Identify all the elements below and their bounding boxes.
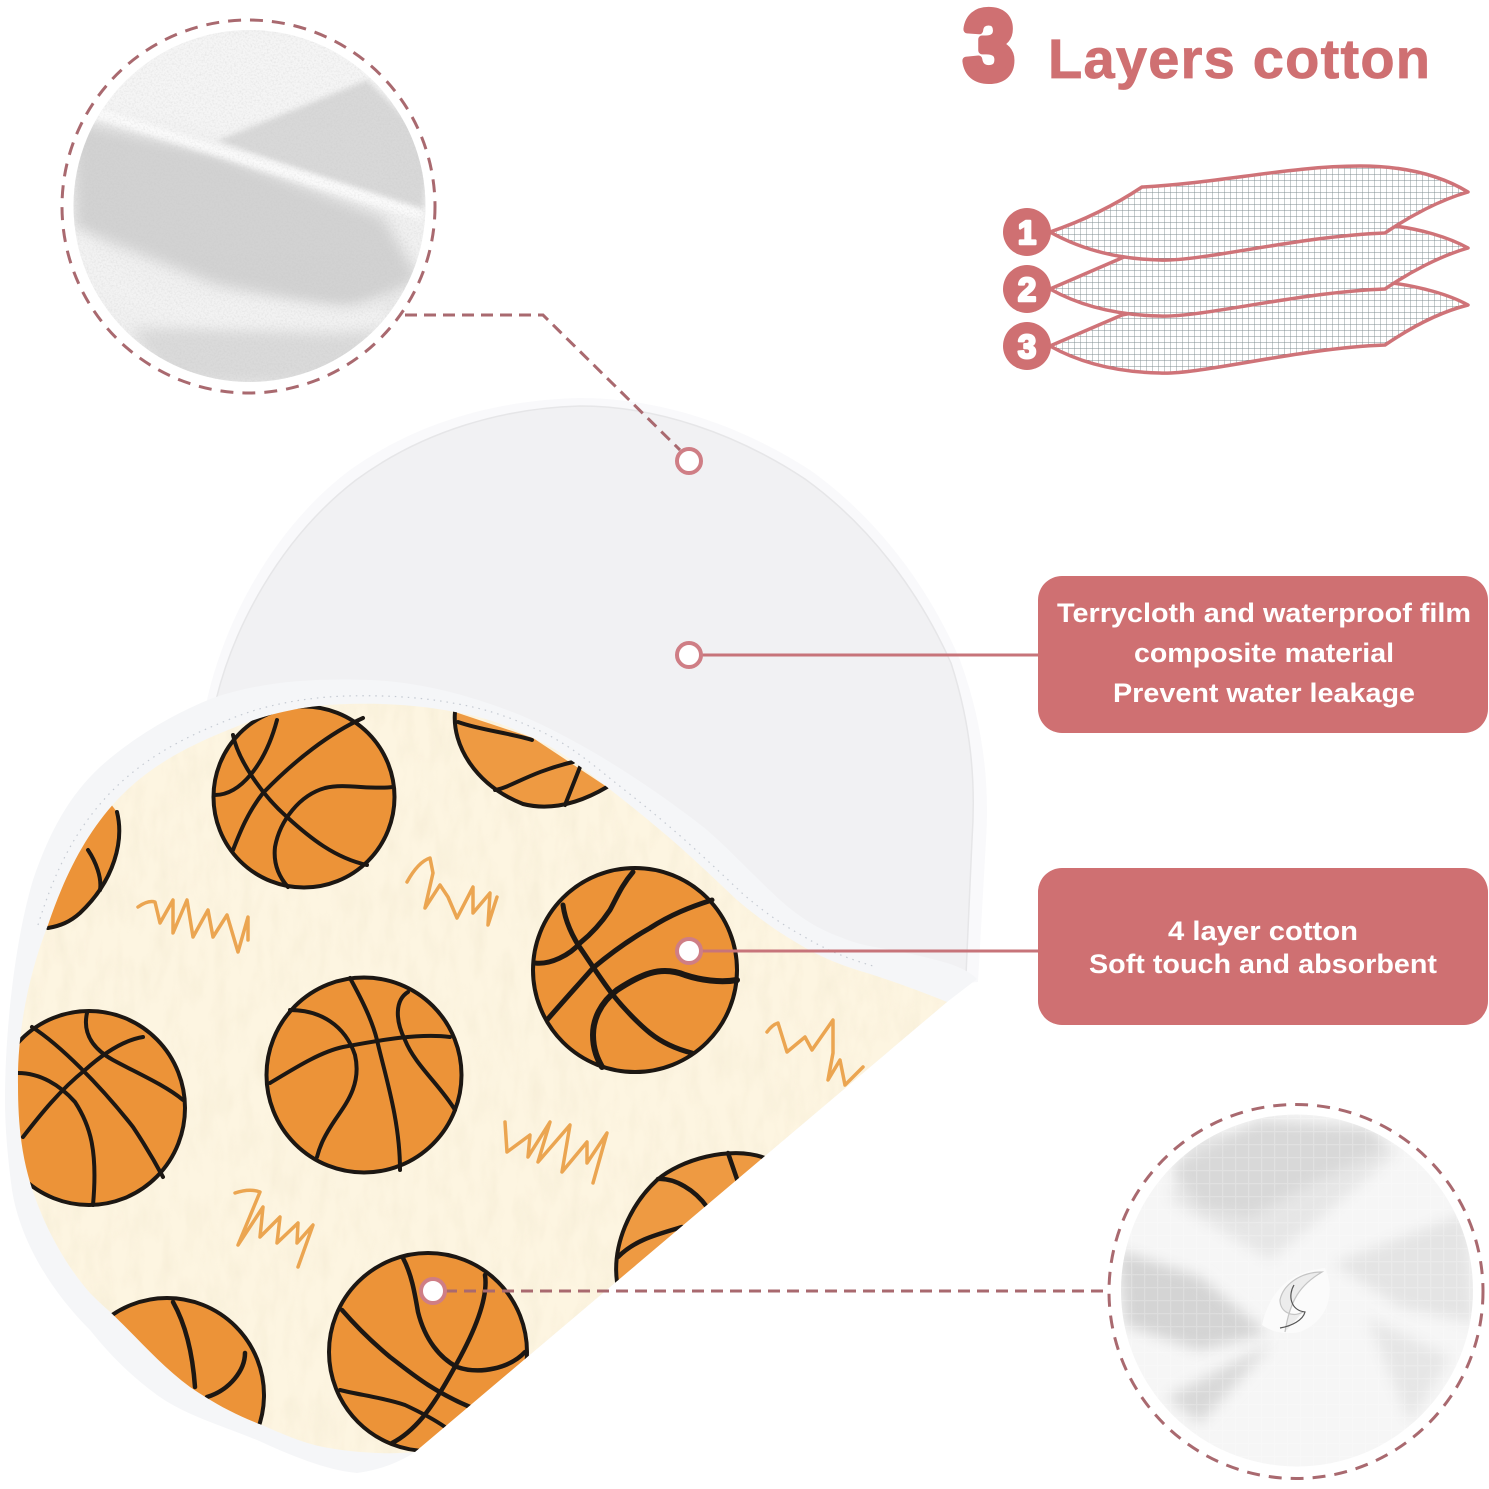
callout: cotton: Soft touch and absorbent [1089,949,1437,979]
layer 1 [1050,166,1468,260]
title [964,0,1430,100]
squiggle decorations [138,858,863,1267]
callout: cotton [1038,868,1488,1025]
callout: cotton: 4 layer cotton [1168,916,1358,946]
binding stitching [38,696,873,966]
muslin close-up circle [1109,1104,1483,1478]
callout: terrycloth: composite material [1134,638,1394,668]
bib front printed muslin with basketballs [0,690,960,1489]
badge 1: 1 [1018,214,1036,251]
bib front binding [5,680,977,1473]
callout: terrycloth [1038,576,1488,733]
basketball 4 [0,1011,185,1205]
callout: terrycloth: Terrycloth and waterproof film [1057,598,1471,628]
basketball 2 (partial) [455,712,607,807]
basketball 3 (partial) [46,806,122,930]
basketball 7 [329,1253,527,1451]
basketball 1 [214,706,394,888]
badge 3 [1003,322,1051,370]
layer 3 [1050,282,1468,373]
badge 3: 3 [1018,328,1036,365]
dashed connector: muslin circle to front of bib [445,1290,1108,1292]
terrycloth close-up circle [62,20,435,393]
diagram: three fabric layers [1003,166,1468,373]
layer 2 [1050,225,1468,316]
dashed connector: terrycloth circle to back of bib [405,315,680,450]
callout: terrycloth: Prevent water leakage [1113,678,1415,708]
marker dot: terrycloth callout [677,643,701,667]
badge 1 [1003,208,1051,256]
badge 2: 2 [1018,271,1036,308]
solid connector: bottom callout [702,950,1040,952]
badge 2 [1003,265,1051,313]
marker dot: muslin close-up [421,1279,445,1303]
basketball 5 [266,978,462,1172]
solid connector: top callout [702,654,1040,656]
basketball 6 [533,868,737,1072]
marker dot: terrycloth close-up [677,449,701,473]
basketball 8 [111,1296,266,1425]
basketball 9 (partial) [616,1153,765,1282]
title: Layers cotton [1048,27,1430,90]
marker dot: cotton callout [677,939,701,963]
bib back side (terrycloth) [205,398,987,1000]
